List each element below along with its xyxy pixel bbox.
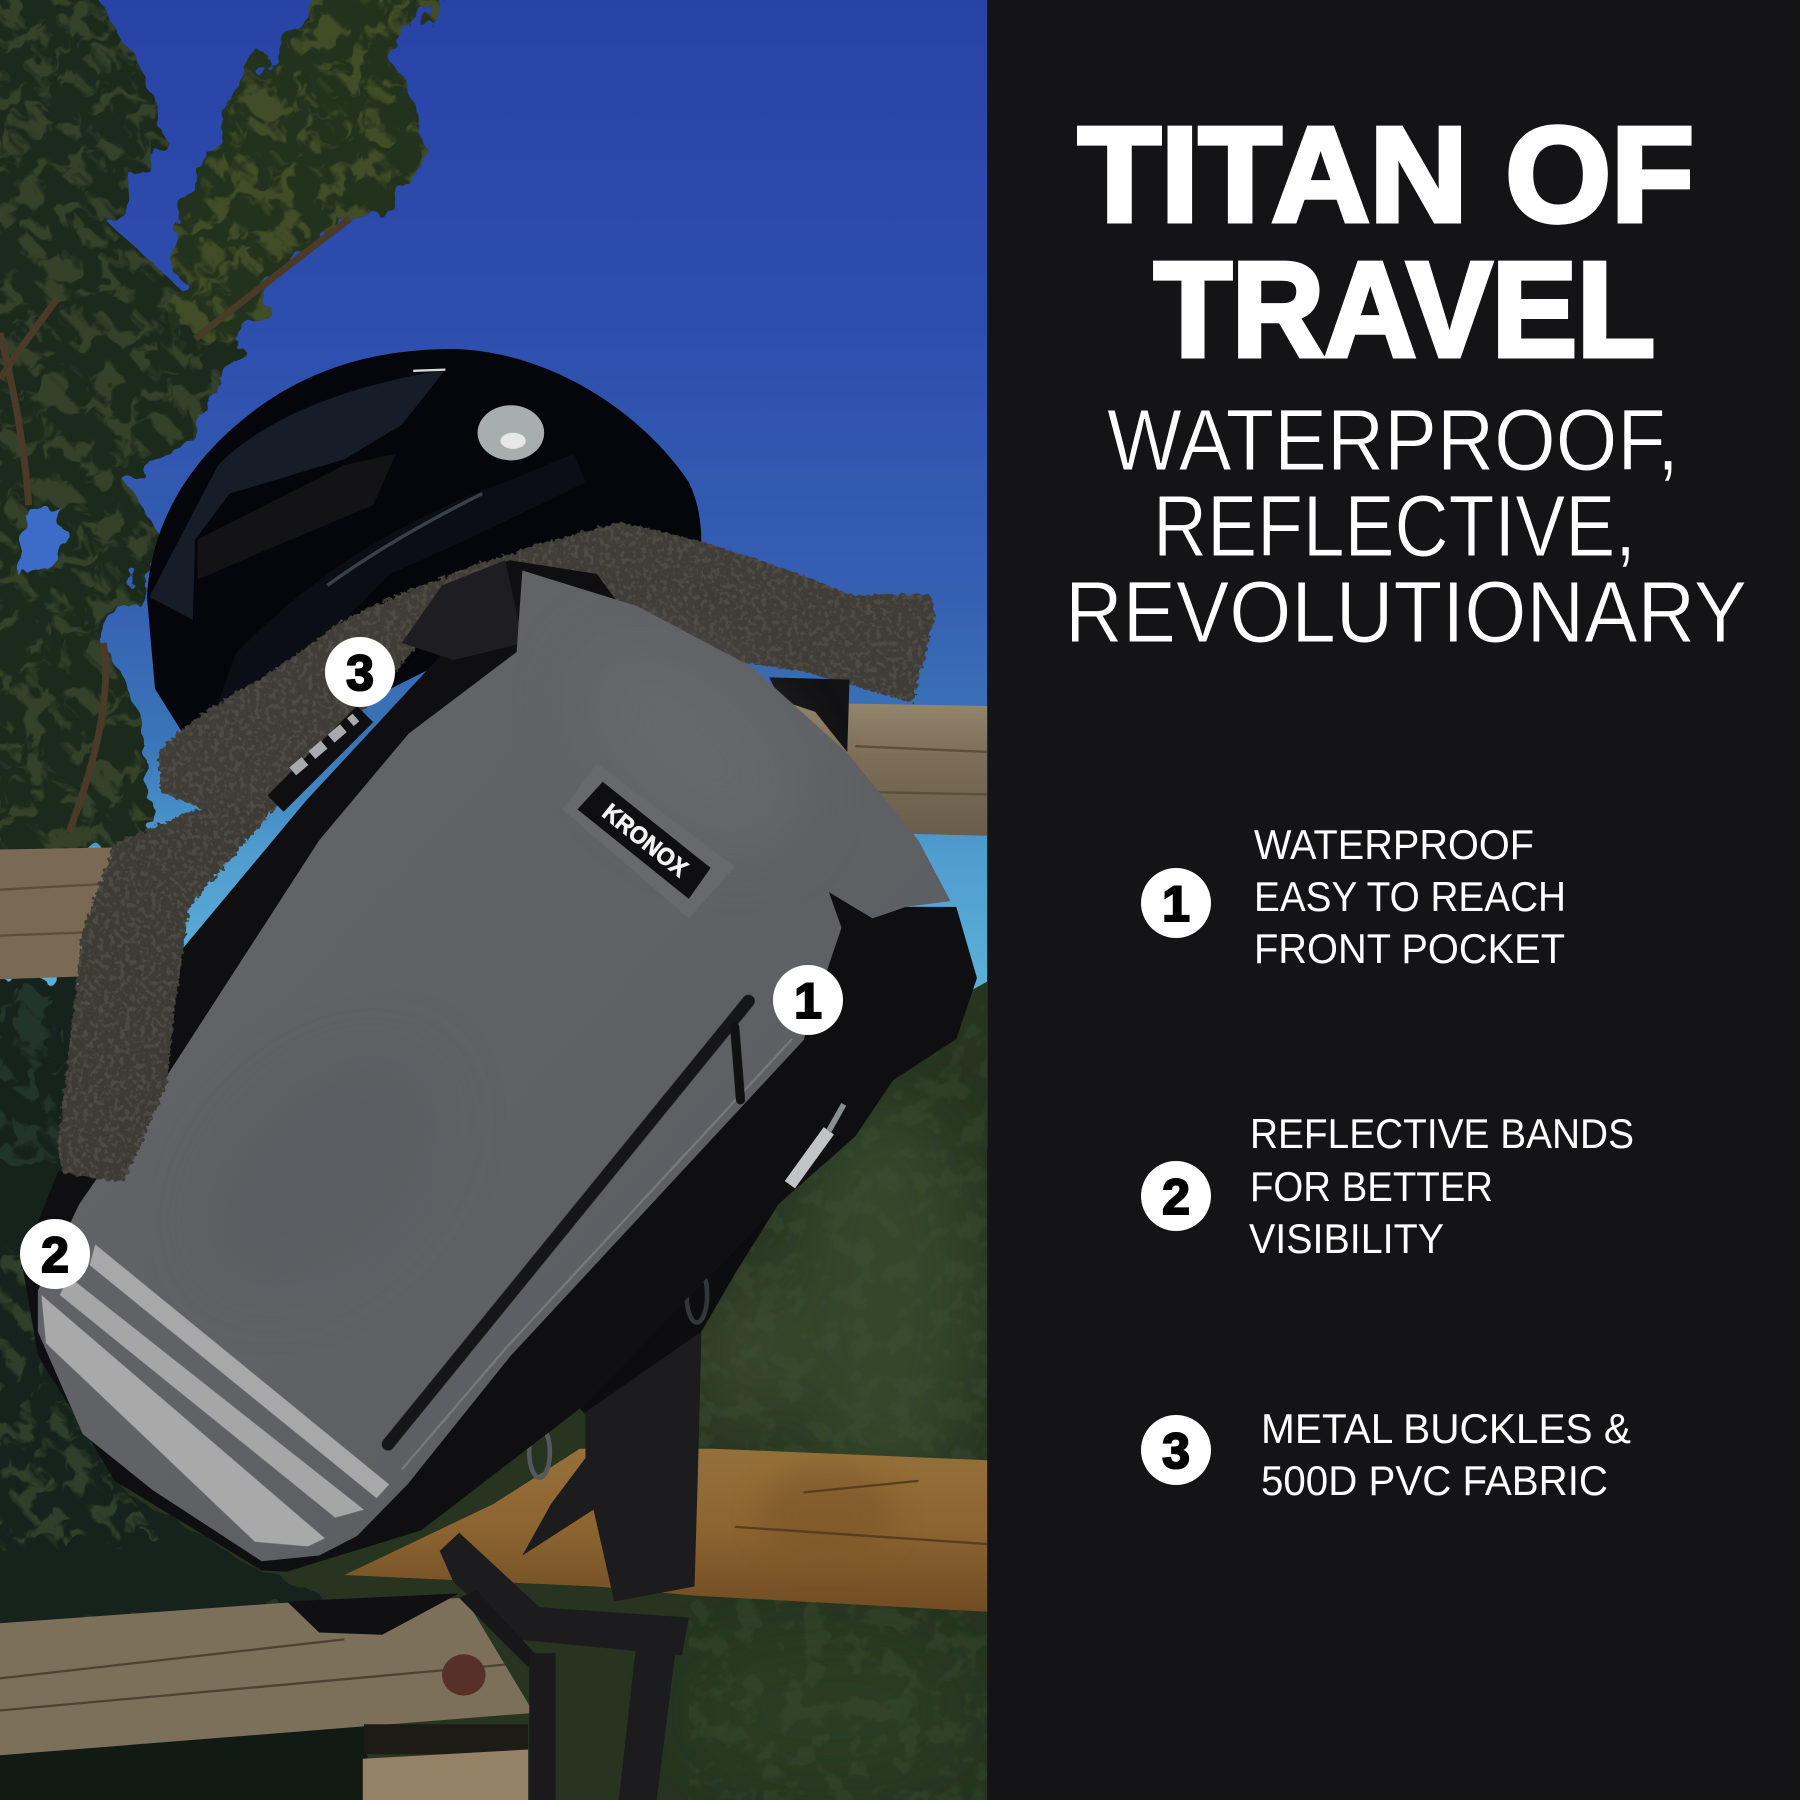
- badge 1: [1141, 868, 1211, 938]
- dark undergrowth: [0, 1722, 367, 1800]
- rusty bolt: [442, 1654, 486, 1696]
- feature 1 text: EASY TO REACH: [1254, 873, 1566, 920]
- panel: text sidebar: [988, 0, 1800, 1800]
- gap of sky in pine: [21, 505, 60, 580]
- feature 3 text: 500D PVC FABRIC: [1261, 1457, 1608, 1504]
- scarf upper band: [158, 522, 936, 827]
- feature 2 text: [1249, 1110, 1634, 1262]
- feature 2 text: REFLECTIVE BANDS: [1250, 1110, 1634, 1157]
- KRONOX patch: [564, 782, 734, 918]
- title: [1078, 99, 1694, 385]
- marker 2 on bands: 2: [41, 1227, 69, 1283]
- subtitle: REVOLUTIONARY: [1065, 564, 1747, 661]
- badge 3: 3: [1162, 1423, 1190, 1479]
- marker 3 on buckle: [325, 637, 395, 707]
- back strap at rail: [769, 677, 850, 752]
- reflective band middle: [60, 1277, 364, 1518]
- bag grey front panel: [38, 571, 951, 1561]
- panel: product photo: [0, 0, 987, 1800]
- bag back straps: [287, 1204, 778, 1800]
- title: TITAN OF: [1078, 99, 1694, 250]
- reflective band wide: [41, 1295, 325, 1546]
- title: TRAVEL: [1154, 234, 1655, 385]
- upper right fence rail: [792, 703, 987, 836]
- feature 3 text: METAL BUCKLES &: [1261, 1405, 1631, 1452]
- subtitle: REFLECTIVE,: [1153, 478, 1636, 575]
- feature 2: [1141, 1110, 1634, 1262]
- feature 1 text: WATERPROOF: [1254, 821, 1534, 868]
- bag black body: [22, 560, 977, 1572]
- reflective band narrow: [90, 1244, 389, 1498]
- buckle hardware: [276, 714, 844, 1185]
- marker 1 on pocket: 1: [794, 973, 822, 1029]
- feature 1: [1141, 821, 1566, 972]
- bag fabric shading: [746, 663, 778, 690]
- front pocket zipper: [388, 1001, 748, 1444]
- feature 2 text: VISIBILITY: [1249, 1215, 1444, 1262]
- marker 1 on pocket: [773, 965, 843, 1035]
- marker 3 on buckle: 3: [346, 645, 374, 701]
- KRONOX patch: KRONOX: [597, 799, 693, 883]
- scarf hanging fringe: [57, 801, 281, 1182]
- pocket seam: [402, 1039, 792, 1469]
- pine tree: [0, 0, 471, 1630]
- marker 2 on bands: [20, 1219, 90, 1289]
- feature 1 text: [1254, 821, 1566, 972]
- lower orange fence rail: [344, 1449, 987, 1612]
- distant forest: [0, 982, 987, 1800]
- feature 3 text: [1261, 1405, 1631, 1504]
- badge 1: 1: [1162, 876, 1190, 932]
- feature 2 text: FOR BETTER: [1250, 1163, 1493, 1210]
- subtitle: WATERPROOF,: [1107, 392, 1679, 489]
- left fence rail: [0, 847, 126, 979]
- lower left fence rail: [0, 1598, 534, 1755]
- badge 2: [1141, 1161, 1211, 1231]
- badge 2: 2: [1162, 1169, 1190, 1225]
- subtitle: [1065, 392, 1747, 661]
- feature 3: [1141, 1405, 1631, 1504]
- sky background: [0, 0, 987, 1148]
- bag roll top fold: [402, 560, 523, 660]
- feature 1 text: FRONT POCKET: [1254, 925, 1565, 972]
- helmet: [147, 349, 701, 746]
- fence post: [363, 1724, 528, 1800]
- badge 3: [1141, 1415, 1211, 1485]
